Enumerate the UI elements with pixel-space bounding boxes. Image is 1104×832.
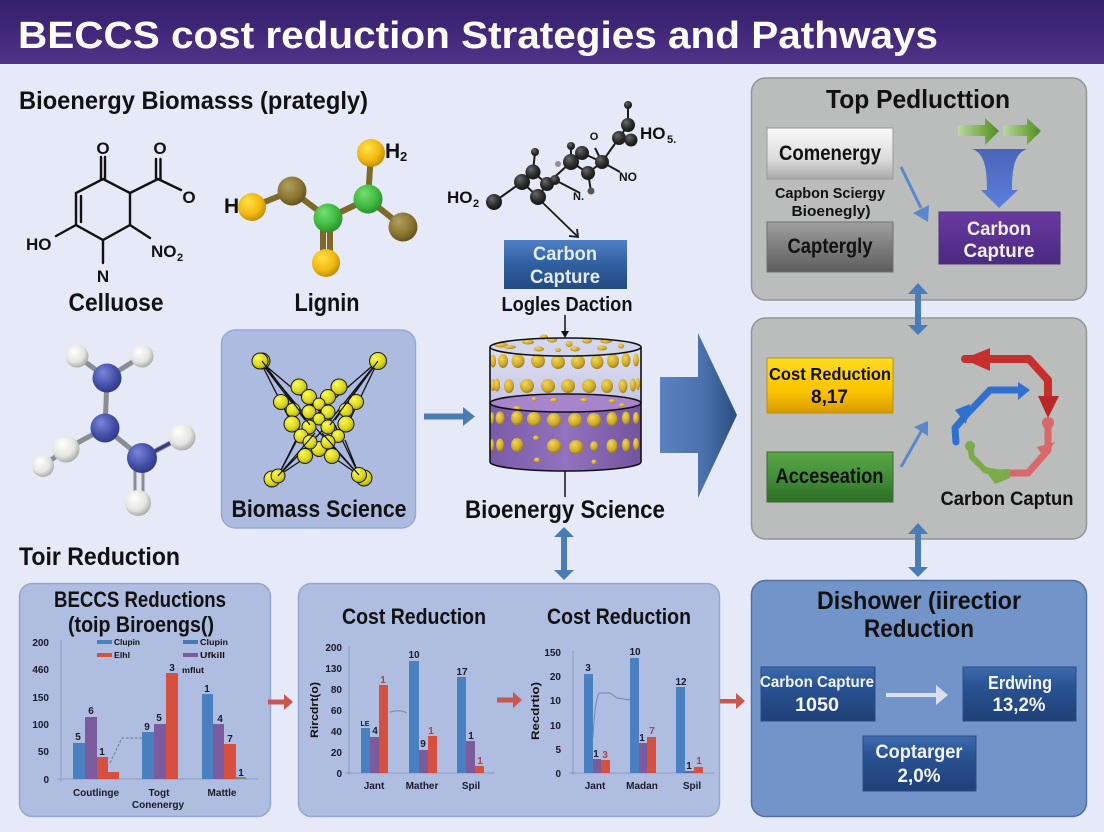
chart: cost reduction right: 5 (555, 745, 561, 756)
box: captergly (767, 222, 893, 272)
chart: cost reduction left: Jant (364, 781, 385, 792)
arrow: molecule to carbon capture (543, 203, 578, 237)
box: coptarger: 2,0% (898, 766, 941, 787)
chart: cost reduction right: Spil (683, 781, 701, 792)
molecule: dark carbon structure: N. (573, 191, 584, 203)
chart: cost reduction right: 1 (686, 761, 692, 772)
panel: biomass science (222, 330, 416, 528)
bar values: 1 (238, 768, 244, 779)
arrow: chart one to two (268, 694, 293, 710)
arrow: logles daction to cylinder (561, 315, 569, 338)
molecule: cellulose: N (97, 267, 109, 286)
box: coptarger: Coptarger (876, 742, 963, 763)
heading: dishower reduction: Reduction (864, 615, 974, 643)
heading: toir reduction: Toir Reduction (19, 543, 180, 571)
chart: cost reduction right: Recdrtio) (530, 682, 542, 740)
molecule: dark carbon structure (447, 101, 676, 210)
box: acceseation green (767, 452, 893, 502)
chart: cost reduction right: Jant (585, 781, 606, 792)
chart: cost reduction left: 4 (372, 726, 378, 737)
chart: cost reduction right: Cost Reduction (547, 604, 691, 629)
box: coptarger (863, 736, 976, 791)
legend: mflut (182, 666, 204, 675)
molecule: dark carbon structure: NO (619, 170, 637, 184)
molecule: cellulose: HO (26, 235, 52, 254)
bar values: 7 (227, 734, 233, 745)
category labels (73, 788, 237, 811)
chart: cost reduction left: 1 (468, 731, 474, 742)
arrow: diagonal to carbon capture (901, 167, 929, 222)
box: carbon capture 1050: Carbon Capture (760, 674, 874, 691)
box: captergly: Captergly (788, 235, 873, 258)
chart: cost reduction left: 10 (408, 650, 420, 661)
panel: cost reduction charts (298, 584, 720, 816)
text: capbon sciergy: Bioenegly) (792, 203, 870, 220)
legend: Clupin (200, 638, 228, 647)
label: bioenergy science: Bioenergy Science (465, 496, 665, 524)
legend: Elhl (114, 651, 130, 660)
y axis labels: 50 (38, 747, 49, 758)
box: comenergy: Comenergy (779, 142, 881, 165)
category labels: Togt (149, 788, 170, 799)
chart: cost reduction right: 10 (629, 647, 641, 658)
chart: cost reduction left: 1 (380, 675, 386, 686)
chart: cost reduction left: 200 (325, 643, 342, 654)
arrow: blue funnel (972, 149, 1027, 208)
chart: cost reduction right: 1 (696, 756, 702, 767)
y axis labels: 100 (32, 720, 49, 731)
molecule: cellulose: 2 (177, 252, 183, 264)
box: carbon capture 1050 (760, 667, 875, 721)
bar values: 3 (169, 663, 175, 674)
title: BECCS cost reduction Strategies and Pathways (18, 15, 938, 57)
box: carbon capture (504, 240, 627, 289)
legend: Clupin (114, 638, 140, 647)
chart: cost reduction left: 80 (331, 685, 342, 696)
chart: cost reduction left: 1 (428, 726, 434, 737)
text: capbon sciergy: Capbon Sciergy (775, 185, 886, 202)
text: capbon sciergy (775, 185, 886, 220)
molecule: lignin (224, 139, 418, 317)
chart: cost reduction right: 0 (555, 769, 561, 780)
arrows: green pair (958, 118, 1041, 145)
double arrow: science to charts (554, 527, 574, 580)
chart: cost reduction left (309, 604, 495, 792)
chart: cost reduction left: 130 (325, 664, 342, 675)
box: erdwing: 13,2% (992, 695, 1046, 716)
heading: dishower reduction (817, 587, 1021, 643)
molecule: dark carbon structure: O (590, 131, 599, 143)
molecule: dark carbon structure: 2 (473, 198, 479, 210)
heading: dishower reduction: Dishower (iirectior (817, 587, 1021, 615)
arrow: diagonal to cycle (901, 421, 928, 467)
molecule: cellulose: O (96, 139, 110, 158)
bar values: 6 (88, 706, 94, 717)
arrow: charts to bottom panel (720, 693, 745, 709)
box: carbon capture purple: Capture (964, 241, 1034, 262)
panel: dishower direction reduction (752, 580, 1086, 816)
y axis labels (32, 638, 49, 786)
icon: yellow nanoparticle cluster (252, 352, 386, 487)
label: biomass science: Biomass Science (232, 496, 406, 523)
bar values: 1 (204, 684, 210, 695)
box: carbon capture purple: Carbon (967, 219, 1031, 240)
chart: cost reduction right: 10 (550, 721, 561, 732)
chart: cost reduction left: Spil (462, 781, 480, 792)
y axis labels: 200 (32, 638, 49, 649)
double arrow: top to middle panel (908, 283, 928, 335)
molecule: cellulose (26, 139, 196, 317)
chart: cost reduction right: 20 (550, 672, 561, 683)
molecule: lignin: H (385, 140, 400, 163)
legend: Ufkill (200, 651, 225, 660)
bar values: 5 (75, 732, 81, 743)
molecule: ball and stick nitrogen (32, 344, 196, 516)
molecule: dark carbon structure: HO (447, 188, 472, 207)
label: lignin: Lignin (294, 289, 360, 317)
bar values: 4 (217, 714, 223, 725)
chart: cost reduction right: Madan (626, 781, 658, 792)
bar values: 1 (99, 747, 105, 758)
box: erdwing (963, 667, 1076, 721)
box: carbon capture purple (939, 212, 1060, 264)
molecule: cellulose: O (182, 188, 196, 207)
legend (97, 638, 228, 675)
connector line under cylinder (564, 471, 566, 497)
chart: cost reduction right: 3 (585, 663, 591, 674)
molecule: lignin: 2 (400, 149, 407, 164)
chart: cost reduction right: 1 (639, 733, 645, 744)
chart: cost reduction left: LE (361, 721, 370, 728)
chart: cost reduction left: 9 (420, 739, 426, 750)
chart: cost reduction left: 1 (477, 756, 483, 767)
label: logles daction: Logles Daction (502, 294, 632, 316)
box: carbon capture 1050: 1050 (795, 695, 839, 716)
chart title: BECCS Reductions (54, 587, 226, 612)
chart: cost reduction right: 150 (544, 648, 561, 659)
chart: cost reduction left: Mather (406, 781, 438, 792)
category labels: Mattle (208, 788, 237, 799)
chart title (54, 587, 226, 637)
box: erdwing: Erdwing (988, 673, 1052, 693)
bar values: 9 (144, 722, 150, 733)
panel: top production (752, 78, 1086, 300)
chart: cost reduction right: 10 (550, 696, 561, 707)
y axis labels: 150 (32, 693, 49, 704)
panel: middle cost reduction (752, 318, 1086, 539)
header banner (0, 0, 1104, 64)
box: cost reduction yellow: Cost Reduction (769, 364, 891, 384)
box: carbon capture: Capture (530, 267, 600, 288)
chart: cost reduction right: 3 (602, 750, 608, 761)
chart: cost reduction left: Rircdrt(o) (309, 682, 321, 738)
chart: cost reduction right (530, 604, 714, 792)
chart: cost reduction right: 12 (675, 677, 687, 688)
category labels: Coutlinge (73, 788, 119, 799)
box: cost reduction yellow (767, 358, 893, 413)
bar values: 5 (156, 713, 162, 724)
cylinder: bioenergy reactor (490, 334, 641, 471)
heading: top pedlucttion: Top Pedlucttion (826, 84, 1010, 114)
bars (73, 673, 246, 779)
label: cellulose: Celluose (68, 289, 164, 317)
box: comenergy (767, 128, 893, 179)
box: carbon capture: Carbon (533, 244, 597, 265)
chart title: (toip Biroengs() (68, 612, 214, 637)
arrow: between charts (497, 692, 522, 708)
category labels: Conenergy (132, 800, 185, 811)
heading: bioenergy biomass: Bioenergy Biomasss (prategly) (19, 87, 368, 115)
molecule: cellulose: O (153, 139, 167, 158)
arrow: light pointer (886, 685, 948, 705)
double arrow: middle to bottom panel (908, 523, 928, 577)
chart: cost reduction left: 0 (336, 769, 342, 780)
bar values (75, 663, 244, 779)
label: carbon captun: Carbon Captun (940, 489, 1074, 510)
chart: cost reduction left: 60 (331, 706, 342, 717)
panel: chart one (20, 584, 270, 816)
chart: cost reduction left: Cost Reduction (342, 604, 486, 629)
y axis labels: 0 (43, 775, 49, 786)
molecule: lignin: H (224, 195, 239, 218)
chart: cost reduction right: 7 (649, 726, 655, 737)
chart: cost reduction left: 40 (331, 727, 342, 738)
arrow: large process arrow (660, 333, 737, 498)
icon: carbon cycle arrows (940, 348, 1074, 510)
arrow: biomass to cylinder (424, 407, 475, 426)
molecule: dark carbon structure: HO (640, 124, 666, 143)
chart: cost reduction left: 17 (456, 667, 468, 678)
y axis labels: 460 (32, 665, 49, 676)
molecule: cellulose: NO (151, 242, 176, 261)
chart: cost reduction right: 1 (593, 749, 599, 760)
chart: cost reduction left: 20 (331, 748, 342, 759)
box: cost reduction yellow: 8,17 (811, 387, 848, 408)
box: acceseation green: Acceseation (776, 465, 884, 488)
molecule: dark carbon structure: 5. (667, 134, 676, 146)
